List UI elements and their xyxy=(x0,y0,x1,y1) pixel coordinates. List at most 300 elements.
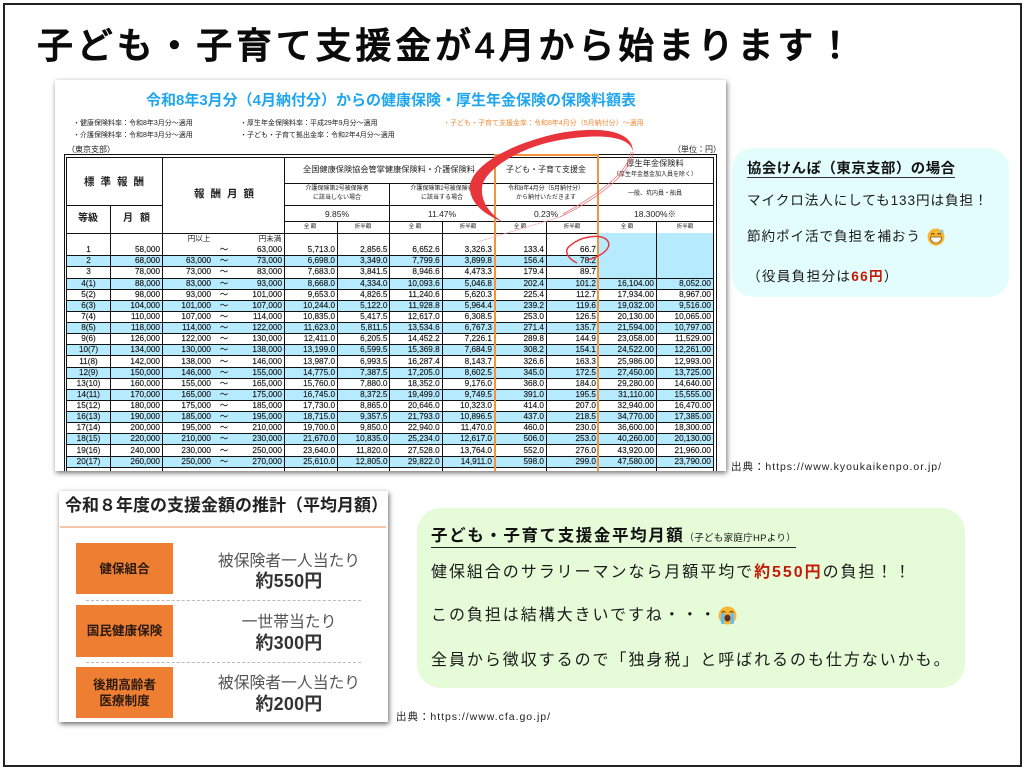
table rows: 104,000 xyxy=(130,301,160,310)
table rows: 10,797.00 xyxy=(675,323,711,332)
table header xyxy=(64,154,717,471)
table rows: 195,000 xyxy=(181,423,211,432)
table rows: 185,000 xyxy=(181,412,211,421)
table rows: 25,234.0 xyxy=(408,434,440,443)
table rows: 16(13) xyxy=(77,412,100,421)
panel: average monthly amount callout xyxy=(417,508,965,688)
table rows: 270,000 xyxy=(252,457,282,466)
table header: 令和8年4月分（5月納付分） xyxy=(508,186,584,192)
table rows: 34,770.00 xyxy=(618,412,654,421)
table rows: ～ xyxy=(220,390,228,399)
table rows: 172.5 xyxy=(575,368,596,377)
table rows: 6,698.0 xyxy=(308,256,335,265)
table rows: ～ xyxy=(220,412,228,421)
table rows: 190,000 xyxy=(130,412,160,421)
table rows: ～ xyxy=(220,434,228,443)
source: cfa: 出典：https://www.cfa.go.jp/ xyxy=(396,711,551,723)
table rows: 20(17) xyxy=(77,457,100,466)
table rows: 8,602.5 xyxy=(465,368,492,377)
table rows: 8,372.5 xyxy=(360,390,388,399)
table rows: 155,000 xyxy=(181,379,211,388)
table rows: 11,820.0 xyxy=(356,446,388,454)
table rows: 17,730.0 xyxy=(303,401,335,410)
callout line 1: マイクロ法人にしても133円は負担！ xyxy=(747,192,988,208)
table rows: 126.5 xyxy=(575,312,596,321)
table rows: 11,529.00 xyxy=(675,334,711,343)
table rows: 9,357.5 xyxy=(360,412,388,421)
table rows: 6,993.5 xyxy=(360,356,388,366)
table rows: 58,000 xyxy=(135,245,160,254)
rate notes: （東京支部） xyxy=(67,145,115,154)
table rows: 13,534.6 xyxy=(408,323,440,332)
table header: に該当しない場合 xyxy=(313,195,361,201)
table rows: 15,369.8 xyxy=(408,345,440,354)
table rows: 3,349.0 xyxy=(360,256,388,265)
source: kyoukaikenpo: 出典：https://www.kyoukaikenpo.or.jp/ xyxy=(731,461,942,473)
table rows: 12,261.00 xyxy=(675,345,711,354)
table rows: ～ xyxy=(220,267,228,276)
label: 医療制度 xyxy=(99,694,150,708)
table rows: 10(7) xyxy=(79,345,98,354)
table rows: ～ xyxy=(220,446,228,454)
table rows: 36,600.00 xyxy=(618,423,654,432)
table rows: 17,385.00 xyxy=(675,412,711,421)
table header: 折半額 xyxy=(677,224,693,230)
table rows: 14(11) xyxy=(77,390,100,399)
table rows: 138,000 xyxy=(181,356,211,366)
panel: kyoukai kenpo callout xyxy=(732,148,1009,297)
table rows: 18,300.00 xyxy=(675,423,711,432)
table rows: 11(8) xyxy=(79,356,98,366)
red hand-drawn circles xyxy=(470,130,634,264)
table rows: 83,000 xyxy=(186,279,211,288)
table rows: 107,000 xyxy=(181,312,211,321)
table rows: 17,205.0 xyxy=(408,368,440,377)
label xyxy=(76,605,173,657)
table rows: ～ xyxy=(220,345,228,354)
table rows: 25,986.00 xyxy=(618,356,654,366)
table rows: 133.4 xyxy=(523,245,544,254)
table header: 全 額 xyxy=(409,224,421,230)
table rows: 271.4 xyxy=(523,323,544,332)
table rows: 230,000 xyxy=(181,446,211,454)
table rows: 239.2 xyxy=(523,301,544,310)
table rows: 107,000 xyxy=(252,301,282,310)
row: late-stage elderly xyxy=(76,667,360,718)
table rows: 9,653.0 xyxy=(308,290,335,299)
table rows: 10,323.0 xyxy=(460,401,492,410)
table rows: 437.0 xyxy=(523,412,544,421)
value: 約550円 xyxy=(255,571,323,591)
table rows: 253.0 xyxy=(575,434,596,443)
table rows: 6(3) xyxy=(81,301,96,310)
table rows: 7,226.1 xyxy=(465,334,492,343)
table rows: 160,000 xyxy=(130,379,160,388)
callout line 3: 全員から徴収するので「独身税」と呼ばれるのも仕方ないかも。 xyxy=(431,652,952,668)
table rows: 4,473.3 xyxy=(465,267,492,276)
table rows: 12(9) xyxy=(79,368,98,377)
table rows: 16,470.00 xyxy=(675,401,711,410)
table rows: 195,000 xyxy=(252,412,282,421)
table rows: 135.7 xyxy=(575,323,596,332)
label: 後期高齢者 xyxy=(93,678,156,692)
table rows: 5,964.4 xyxy=(465,301,492,310)
table rows: 289.8 xyxy=(523,334,544,343)
table rows: 460.0 xyxy=(523,423,544,432)
icon: crying emoji xyxy=(718,606,736,624)
label: 健保組合 xyxy=(99,562,150,576)
table header: 全 額 xyxy=(304,224,316,230)
table rows: 15,555.00 xyxy=(675,390,711,399)
table rows: 47,580.00 xyxy=(618,457,654,466)
amount: 一世帯当たり xyxy=(242,614,336,630)
table rows: 175,000 xyxy=(252,390,282,399)
table rows: 9,850.0 xyxy=(360,423,388,432)
table rows: 13(10) xyxy=(77,379,100,388)
table column lines xyxy=(66,157,714,471)
table rows: 308.2 xyxy=(523,345,544,354)
rate notes: ・子ども・子育て拠出金率：令和2年4月分～適用 xyxy=(240,132,395,139)
table rows: 184.0 xyxy=(575,379,596,388)
callout line 1: 健保組合のサラリーマンなら月額平均で約550円の負担！！ xyxy=(431,564,912,580)
table rows: 7,387.5 xyxy=(360,368,388,377)
table rows: 118,000 xyxy=(131,323,160,332)
table rows: 414.0 xyxy=(523,401,544,410)
table rows: 78,000 xyxy=(135,267,160,276)
table rows: 225.4 xyxy=(523,290,544,299)
table header: 報酬月額 xyxy=(194,188,260,200)
table rows: 19,700.0 xyxy=(303,423,335,432)
table rows: 3,326.3 xyxy=(465,245,492,254)
table rows: 23,058.00 xyxy=(618,334,654,343)
table rows: 8,668.0 xyxy=(308,279,335,288)
table rows: 5,046.8 xyxy=(465,279,492,288)
table rows: ～ xyxy=(220,423,228,432)
table rows: 101.2 xyxy=(575,279,596,288)
table rows: 14,775.0 xyxy=(303,368,335,377)
table rows: 14,911.0 xyxy=(461,457,492,466)
table rows: 156.4 xyxy=(523,256,544,265)
table header: 厚生年金保険料 xyxy=(626,159,684,168)
table rows: 93,000 xyxy=(186,290,211,299)
table rows: 16,745.0 xyxy=(303,390,335,399)
table rows: 163.3 xyxy=(575,356,596,366)
table rows: 18(15) xyxy=(77,434,100,443)
table rows: 154.1 xyxy=(575,345,596,354)
table rows: 13,725.00 xyxy=(675,368,711,377)
table rows: ～ xyxy=(220,323,228,332)
table rows: 11,470.0 xyxy=(461,423,492,432)
table rows: 3 xyxy=(86,267,91,276)
table rows: 18,352.0 xyxy=(408,379,440,388)
table rows: 8,865.0 xyxy=(360,401,388,410)
table rows: 21,793.0 xyxy=(408,412,440,421)
table rows: 24,522.00 xyxy=(618,345,654,354)
table header: 折半額 xyxy=(460,224,476,230)
callout heading: 協会けんぽ（東京支部）の場合 xyxy=(747,161,955,177)
table rows: 11,928.8 xyxy=(408,301,440,310)
table rows: 13,764.0 xyxy=(460,446,492,454)
table rows: 4(1) xyxy=(81,279,96,288)
value: 約200円 xyxy=(255,694,323,714)
table rows: 93,000 xyxy=(257,279,282,288)
table rows: 5(2) xyxy=(81,290,96,299)
table rows: 9(6) xyxy=(81,334,96,343)
table rows: 27,450.00 xyxy=(618,368,654,377)
table rows: 63,000 xyxy=(186,256,211,265)
table header: 全 額 xyxy=(514,224,526,230)
table rows: 130,000 xyxy=(252,334,282,343)
icon: sweat smile emoji xyxy=(928,228,944,246)
table rows: 175,000 xyxy=(181,401,211,410)
table header: から納付いただきます xyxy=(516,195,576,201)
table rows: 345.0 xyxy=(523,368,544,377)
table rows: 73,000 xyxy=(186,267,211,276)
table rows: 142,000 xyxy=(130,356,160,366)
table rows: 19(16) xyxy=(77,446,100,454)
table rows: 13,199.0 xyxy=(303,345,335,354)
table header: 9.85% xyxy=(325,209,349,219)
heading rule xyxy=(60,526,386,528)
table rows: 210,000 xyxy=(252,423,282,432)
table heading: 令和8年3月分（4月納付分）からの健康保険・厚生年金保険の保険料額表 xyxy=(146,92,636,108)
amount: 被保険者一人当たり xyxy=(218,675,360,692)
table rows: 119.6 xyxy=(576,301,596,310)
table rows: 11,623.0 xyxy=(304,323,335,332)
table rows: 9,749.5 xyxy=(465,390,492,399)
table rows: 122,000 xyxy=(181,334,211,343)
table rows: ～ xyxy=(220,312,228,321)
table rows: 170,000 xyxy=(130,390,160,399)
table rows: 326.6 xyxy=(523,356,544,366)
table rows: 13,987.0 xyxy=(303,356,335,366)
table rows: 240,000 xyxy=(130,446,160,454)
table rows: ～ xyxy=(220,457,228,466)
table rows: 10,896.5 xyxy=(460,412,492,421)
table rows: 66.7 xyxy=(580,245,596,254)
rate notes: ・子ども・子育て支援金率：令和8年4月分（5月納付分）～適用 xyxy=(443,120,644,127)
callout line 2: この負担は結構大きいですね・・・ xyxy=(431,607,718,624)
table rows: ～ xyxy=(220,290,228,299)
table rows: 5,620.3 xyxy=(465,290,492,299)
table rows: ～ xyxy=(220,356,228,366)
table rows: 18,715.0 xyxy=(303,412,335,421)
table rows: 299.0 xyxy=(575,457,596,466)
table rows: 2 xyxy=(86,256,91,265)
rate notes: ・介護保険料率：令和8年3月分～適用 xyxy=(73,132,193,139)
table rows: 22,940.0 xyxy=(408,423,440,432)
rate notes: ・厚生年金保険料率：平成29年9月分～適用 xyxy=(240,120,378,127)
table rows: 17(14) xyxy=(77,423,100,432)
table rows: 9,176.0 xyxy=(465,379,492,388)
table rows: 14,452.2 xyxy=(408,334,440,343)
table rows: 6,767.3 xyxy=(465,323,492,332)
table rows: 15(12) xyxy=(77,401,100,410)
table rows: 78.2 xyxy=(580,256,596,265)
table rows: 17,934.00 xyxy=(618,290,654,299)
table rows: 146,000 xyxy=(181,368,211,377)
table rows: 114,000 xyxy=(182,323,211,332)
table rows: 552.0 xyxy=(523,446,544,454)
table rows: 29,280.00 xyxy=(618,379,654,388)
table rows: 260,000 xyxy=(130,457,160,466)
table rows: 112.7 xyxy=(576,290,596,299)
range unit: to: 円未満 xyxy=(259,234,281,243)
table rows: 185,000 xyxy=(252,401,282,410)
table rows: 7,683.0 xyxy=(308,267,335,276)
table rows: 10,244.0 xyxy=(303,301,335,310)
table rows: 250,000 xyxy=(252,446,282,454)
table rows: 68,000 xyxy=(135,256,160,265)
table header: 等級 xyxy=(78,213,98,224)
table rows: ～ xyxy=(220,368,228,377)
table header: 18.300%※ xyxy=(634,209,676,219)
table rows: 6,205.5 xyxy=(360,334,388,343)
table rows: 150,000 xyxy=(130,368,160,377)
table header: （厚生年金基金加入員を除く） xyxy=(613,172,697,178)
table rows: 40,260.00 xyxy=(618,434,654,443)
table header: 全 額 xyxy=(621,224,633,230)
rate notes: ・健康保険料率：令和8年3月分～適用 xyxy=(73,120,193,127)
table rows: 10,065.00 xyxy=(675,312,711,321)
table rows: 7,880.0 xyxy=(360,379,388,388)
table header: 一般、坑内員・船員 xyxy=(628,191,682,197)
table rows: 9,516.00 xyxy=(679,301,711,310)
table header: 標準報酬 xyxy=(84,176,150,188)
table rows: 27,528.0 xyxy=(408,446,440,454)
table rows: 146,000 xyxy=(252,356,282,366)
table header: に該当する場合 xyxy=(421,195,463,201)
table rows: 7,799.6 xyxy=(412,256,440,265)
table rows: 155,000 xyxy=(252,368,282,377)
table rows: 32,940.00 xyxy=(618,401,654,410)
table rows xyxy=(67,233,713,468)
table header: 子ども・子育て支援金 xyxy=(506,165,586,174)
table rows: 5,713.0 xyxy=(308,245,335,254)
table rows: 165,000 xyxy=(252,379,282,388)
table rows: 6,308.5 xyxy=(465,312,492,321)
table rows: 598.0 xyxy=(523,457,544,466)
table rows: 6,652.6 xyxy=(412,245,440,254)
table rows: 253.0 xyxy=(523,312,544,321)
table rows: 31,110.00 xyxy=(618,390,654,399)
callout heading: 子ども・子育て支援金平均月額（子ども家庭庁HPより） xyxy=(431,527,796,545)
table rows: ～ xyxy=(220,334,228,343)
table rows: 250,000 xyxy=(181,457,211,466)
label xyxy=(76,667,173,718)
table header: 折半額 xyxy=(355,224,371,230)
row: health insurance societies xyxy=(76,543,360,594)
table rows: 25,610.0 xyxy=(303,457,335,466)
table rows: 3,841.5 xyxy=(360,267,388,276)
table rows: 2,856.5 xyxy=(360,245,388,254)
table rows: 63,000 xyxy=(257,245,282,254)
table rows: 7,684.9 xyxy=(465,345,492,354)
table rows: 276.0 xyxy=(575,446,596,454)
table rows: 230,000 xyxy=(252,434,282,443)
table rows: 83,000 xyxy=(257,267,282,276)
table rows: 8(5) xyxy=(81,323,96,332)
table rows: 5,811.5 xyxy=(361,323,388,332)
table rows: 29,822.0 xyxy=(408,457,440,466)
panel: estimated support amounts slide xyxy=(59,491,388,722)
table rows: 10,093.6 xyxy=(408,279,440,288)
title: 子ども・子育て支援金が4月から始まります！ xyxy=(37,25,857,66)
table header: 折半額 xyxy=(564,224,580,230)
table rows: 20,646.0 xyxy=(408,401,440,410)
table rows: 19,499.0 xyxy=(408,390,440,399)
table rows: 12,617.0 xyxy=(460,434,492,443)
table rows: 180,000 xyxy=(130,401,160,410)
table rows: 88,000 xyxy=(135,279,160,288)
table rows: 10,835.0 xyxy=(356,434,388,443)
rate notes xyxy=(67,119,721,154)
table rows: 89.7 xyxy=(580,267,596,276)
table rows: ～ xyxy=(220,301,228,310)
table rows: ～ xyxy=(220,379,228,388)
callout line 2: 節約ポイ活で負担を補おう xyxy=(747,229,921,244)
table rows: 5,122.0 xyxy=(360,301,388,310)
table rows: 144.9 xyxy=(575,334,596,343)
table rows: 12,617.0 xyxy=(408,312,440,321)
table header: 月額 xyxy=(123,213,157,224)
range unit: from: 円以上 xyxy=(188,234,210,243)
pension columns blank block xyxy=(598,233,713,278)
table rows: 5,417.5 xyxy=(360,312,388,321)
slide heading: 令和８年度の支援金額の推計（平均月額） xyxy=(65,496,388,515)
table rows: 110,000 xyxy=(131,312,160,321)
table rows: 138,000 xyxy=(252,345,282,354)
table rows: 195.5 xyxy=(575,390,596,399)
table rows: 130,000 xyxy=(181,345,211,354)
table rows: ～ xyxy=(220,245,228,254)
table rows: 179.4 xyxy=(523,267,544,276)
table rows: 200,000 xyxy=(130,423,160,432)
table rows: 43,920.00 xyxy=(618,446,654,454)
table rows: 114,000 xyxy=(253,312,282,321)
orange highlight frame xyxy=(494,154,599,474)
row: national health insurance xyxy=(76,605,336,657)
value: 約300円 xyxy=(255,633,323,653)
table rows: 122,000 xyxy=(252,323,282,332)
table rows: 165,000 xyxy=(181,390,211,399)
table header: 介護保険第2号被保険者 xyxy=(305,186,369,192)
table rows: 16,104.00 xyxy=(618,279,654,288)
table rows: 391.0 xyxy=(523,390,544,399)
callout line 3: （役員負担分は66円） xyxy=(747,269,899,284)
table rows: 98,000 xyxy=(135,290,160,299)
table rows: 12,411.0 xyxy=(304,334,335,343)
table rows: 230.0 xyxy=(575,423,596,432)
table rows: 15,760.0 xyxy=(303,379,335,388)
table rows: 16,287.4 xyxy=(408,356,440,366)
label: 国民健康保険 xyxy=(87,624,162,638)
table rows: 6,599.5 xyxy=(360,345,388,354)
table rows: 218.5 xyxy=(575,412,596,421)
rate notes: （単位：円） xyxy=(673,145,721,154)
table rows: 101,000 xyxy=(252,290,282,299)
panel: insurance premium table xyxy=(55,80,726,471)
table rows: 126,000 xyxy=(130,334,160,343)
table header: 介護保険第2号被保険者 xyxy=(410,186,474,192)
table rows: 220,000 xyxy=(130,434,160,443)
table rows: 19,032.00 xyxy=(618,301,654,310)
table rows: 20,130.00 xyxy=(675,434,711,443)
table rows: 11,240.6 xyxy=(408,290,440,299)
table rows: 101,000 xyxy=(181,301,211,310)
table rows: 21,960.00 xyxy=(675,446,711,454)
table rows: ～ xyxy=(220,256,228,265)
